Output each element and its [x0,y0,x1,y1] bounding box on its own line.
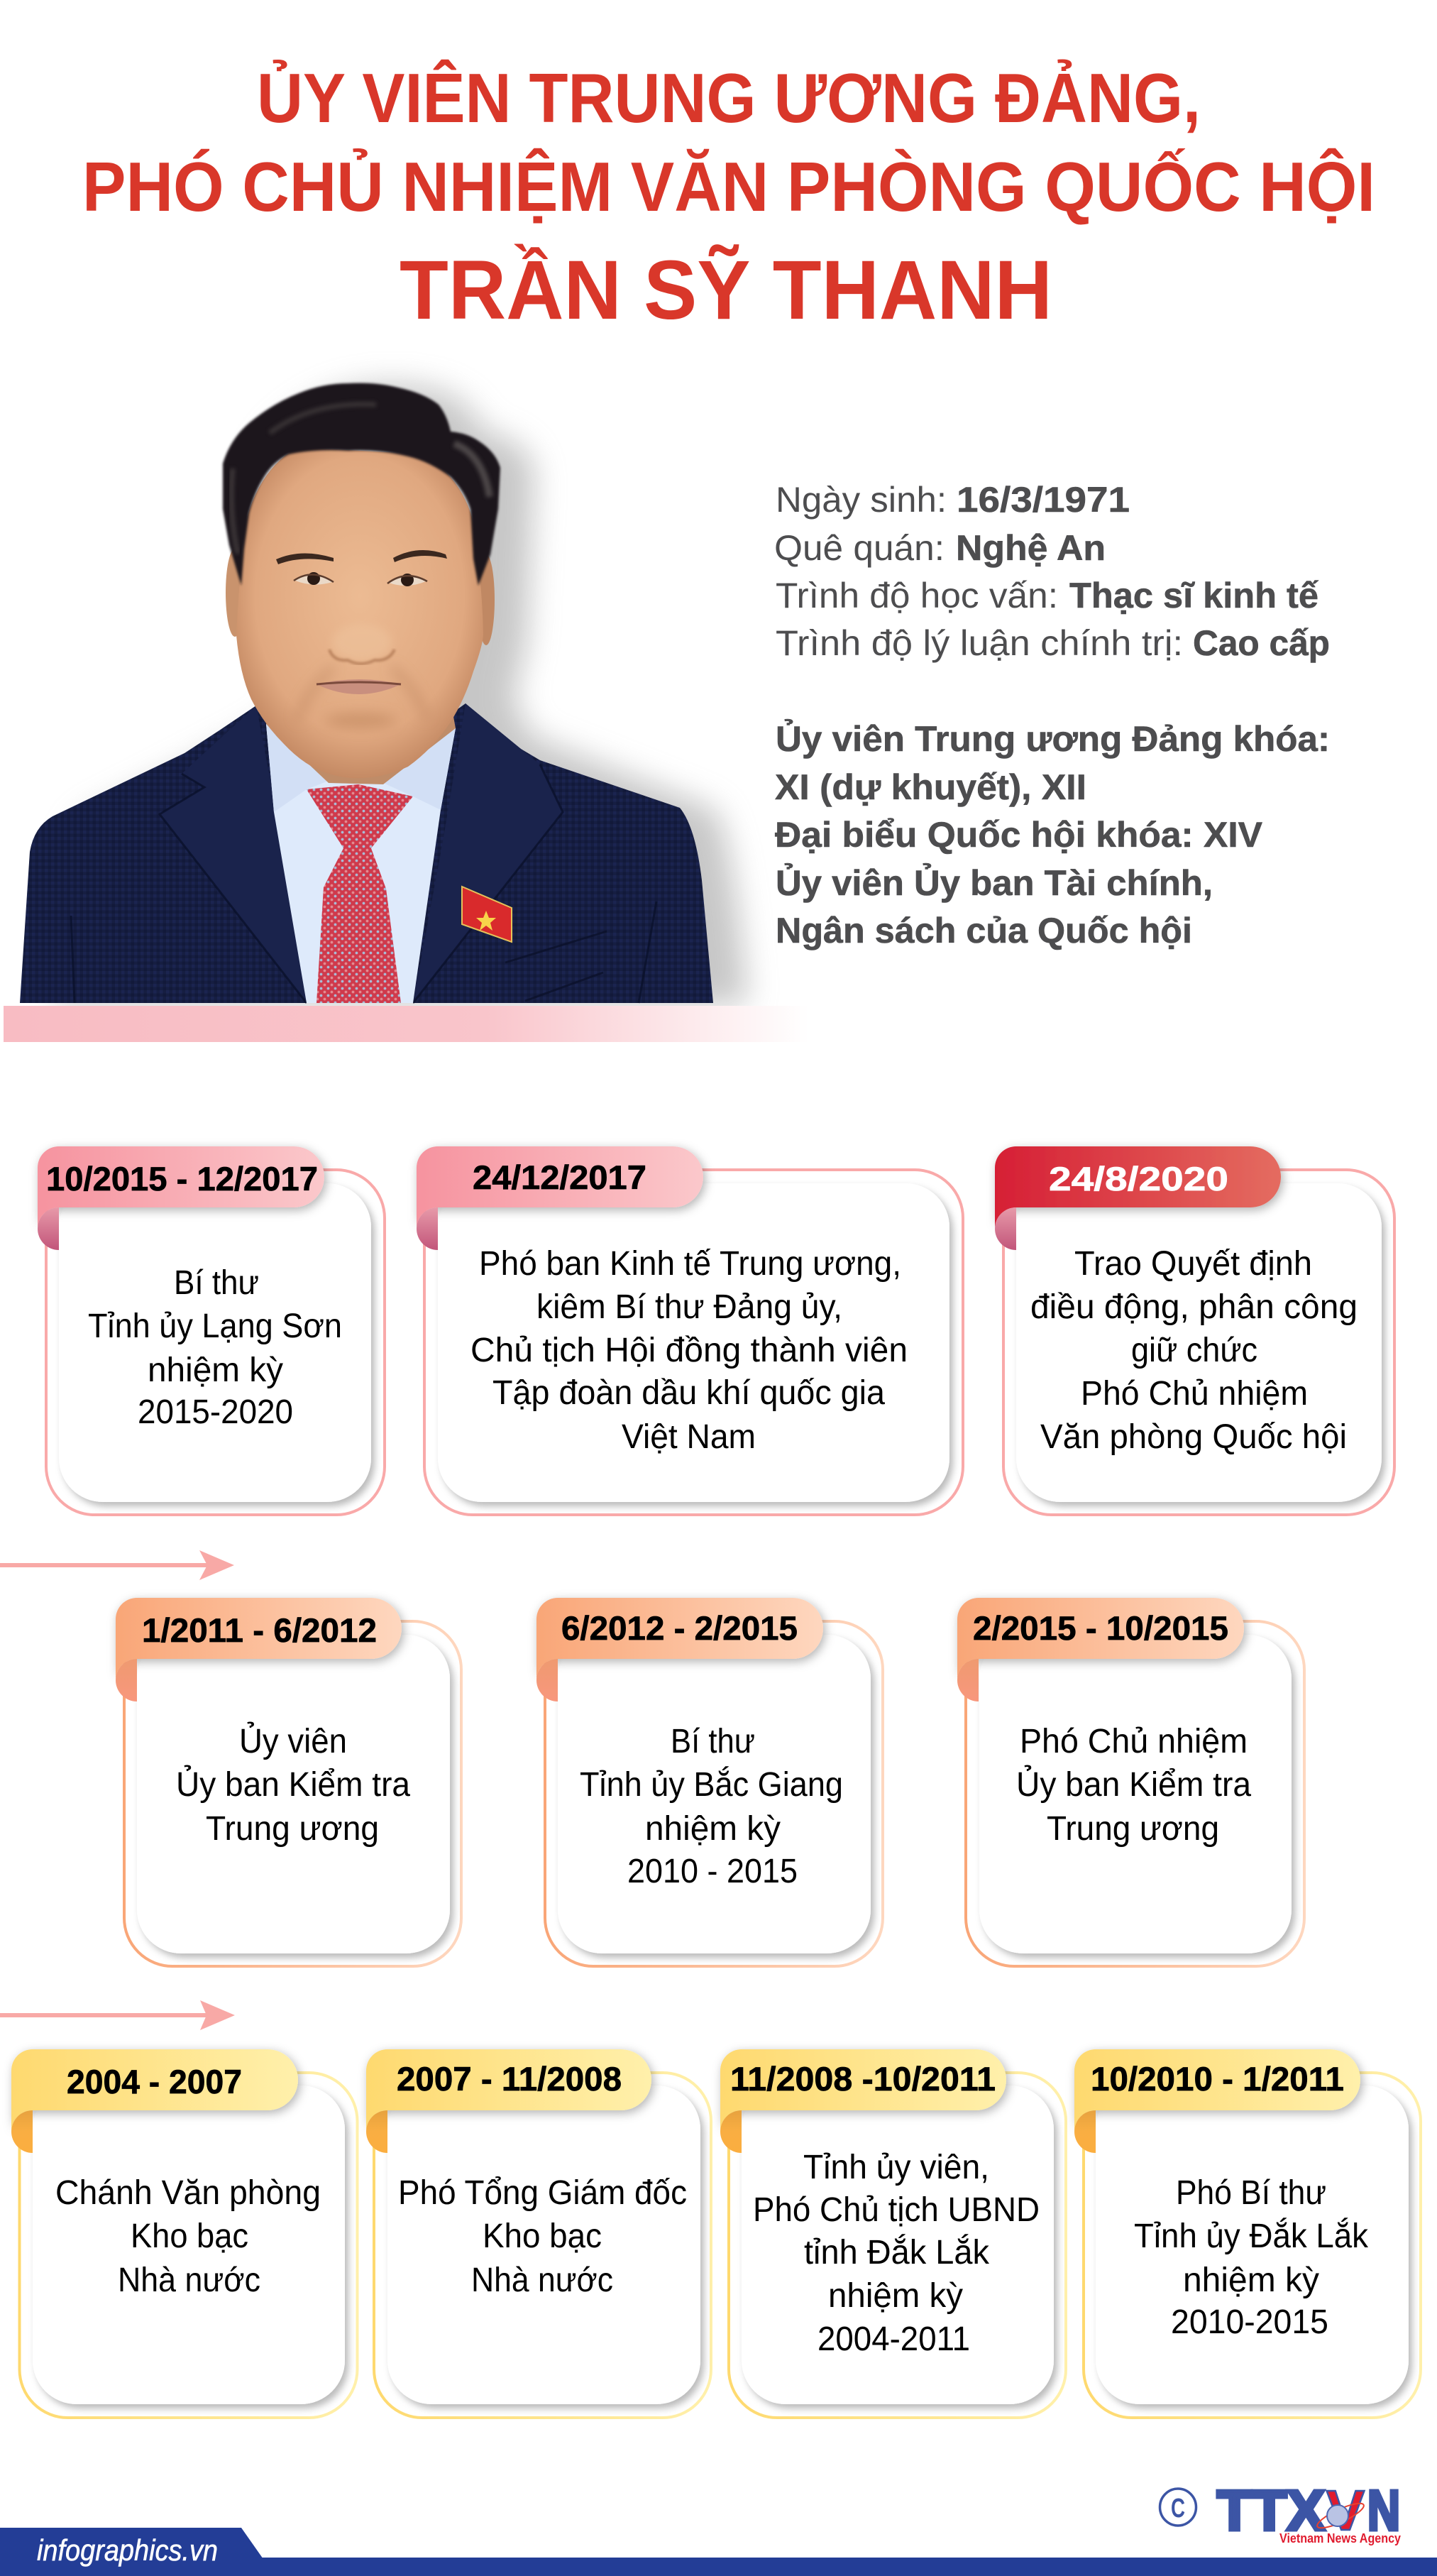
date ribbon: 1/2011 - 6/2012 [142,1611,377,1649]
date ribbon: 2/2015 - 10/2015 [973,1609,1228,1647]
biography facts: Thạc sĩ kinh tế [1069,576,1318,615]
biography positions: XI (dự khuyết), XII [775,767,1086,807]
arrow: row 2 to row 3 [0,2000,235,2030]
necktie [307,784,413,1003]
date ribbon [11,2049,298,2153]
title: PHÓ CHỦ NHIỆM VĂN PHÒNG QUỐC HỘI [82,148,1375,226]
date ribbon [417,1146,703,1250]
card text: 2004-2011 [817,2320,970,2358]
card text: Phó Chủ nhiệm [1020,1723,1248,1760]
card text: giữ chức [1131,1332,1257,1369]
card text: Kho bạc [131,2218,248,2255]
biography facts: Nghệ An [956,528,1106,568]
biography facts: Quê quán: [774,528,945,568]
hair [223,383,500,586]
footer site name: infographics.vn [37,2533,218,2567]
lapel pin flag [462,887,512,942]
card: 24/8/2020 [995,1146,1394,1515]
card text: Chánh Văn phòng [55,2174,321,2212]
title: TRẦN SỸ THANH [400,243,1052,337]
face shading [298,667,426,728]
card text: 2010 - 2015 [627,1853,798,1890]
title [82,59,1375,337]
date ribbon: 10/2010 - 1/2011 [1091,2060,1344,2098]
card text [1134,2174,1369,2341]
shirt [266,724,456,1003]
icon: globe [1315,2499,1366,2532]
card text: Tỉnh ủy Đắk Lắk [1134,2217,1369,2255]
card text: tỉnh Đắk Lắk [804,2233,990,2271]
date ribbon: 10/2015 - 12/2017 [46,1160,318,1197]
card text [580,1723,843,1890]
biography positions: Ủy viên Trung ương Đảng khóa: [776,718,1330,759]
card text [1016,1723,1251,1848]
date ribbon [1074,2049,1360,2153]
card text: Kho bạc [483,2218,602,2255]
date ribbon: 6/2012 - 2/2015 [561,1609,798,1647]
card text: Tỉnh ủy viên, [803,2149,989,2186]
card text: Phó ban Kinh tế Trung ương, [479,1245,901,1283]
card text: Tỉnh ủy Lạng Sơn [88,1308,342,1345]
card text: nhiệm kỳ [148,1352,283,1389]
collar [266,724,329,812]
date ribbon: 2004 - 2007 [67,2063,242,2100]
card text: Văn phòng Quốc hội [1040,1418,1347,1456]
card text: Tỉnh ủy Bắc Giang [580,1765,843,1804]
card text: Phó Bí thư [1176,2174,1326,2212]
nose [329,624,395,664]
card text: Chủ tịch Hội đồng thành viên [470,1332,908,1369]
card text: Ủy viên [239,1721,347,1760]
card text: 2010-2015 [1171,2303,1328,2341]
date ribbon: 24/12/2017 [473,1158,646,1196]
date ribbon [116,1598,402,1701]
date ribbon [366,2049,651,2153]
biography facts: 16/3/1971 [957,480,1130,520]
biography facts: Trình độ lý luận chính trị: [776,623,1183,663]
biography facts [774,480,1330,663]
title: ỦY VIÊN TRUNG ƯƠNG ĐẢNG, [257,59,1201,137]
card: 2004 - 2007 [11,2049,358,2418]
footer band [0,2528,1437,2576]
icon: copyright [1160,2489,1196,2526]
biography facts: Cao cấp [1193,623,1330,663]
biography positions [775,718,1330,950]
icon: copyright: C [1171,2494,1185,2523]
date ribbon: 24/8/2020 [1049,1160,1228,1197]
card text: kiêm Bí thư Đảng ủy, [536,1288,842,1326]
date ribbon [536,1598,823,1701]
arrow: row 1 to row 2 [0,1550,234,1580]
card: 2/2015 - 10/2015 [957,1598,1304,1966]
card text: Nhà nước [118,2262,260,2299]
card text: Phó Tổng Giám đốc [398,2174,687,2212]
mouth [316,679,401,694]
biography positions: Đại biểu Quốc hội khóa: XIV [775,815,1263,855]
card text: nhiệm kỳ [645,1810,781,1848]
logo: TTXVN: V [1326,2479,1365,2542]
logo: TTXVN: Vietnam News Agency [1279,2531,1401,2545]
card text: điều động, phân công [1030,1288,1358,1326]
card: 2007 - 11/2008 [366,2049,711,2418]
card text: Trung ương [1047,1810,1219,1848]
card: 11/2008 - 10/2011 [720,2049,1066,2418]
card text: Việt Nam [622,1418,756,1456]
date ribbon: 2007 - 11/2008 [397,2060,622,2098]
face [236,447,483,778]
biography facts: Trình độ học vấn: [776,576,1058,615]
biography facts: Ngày sinh: [776,480,947,520]
card text: Phó Chủ tịch UBND [753,2191,1040,2229]
card: 1/2011 - 6/2012 [116,1598,461,1966]
card: 10/2010 - 1/2011 [1074,2049,1421,2418]
suit jacket [20,703,713,1003]
logo: TTXVN: N [1367,2479,1400,2542]
card text: nhiệm kỳ [1183,2262,1319,2299]
card text: Ủy ban Kiểm tra [1016,1765,1251,1804]
biography positions: Ngân sách của Quốc hội [776,911,1192,950]
card text: Trao Quyết định [1074,1245,1312,1283]
card text: 2015-2020 [138,1393,293,1431]
ears [226,549,244,637]
card text [55,2174,321,2299]
logo: TTXVN: TTX [1217,2479,1325,2542]
card text: Tập đoàn dầu khí quốc gia [492,1374,885,1412]
card: 6/2012 - 2/2015 [536,1598,883,1966]
card: 24/12/2017 [417,1146,963,1515]
card text: Bí thư [174,1264,259,1302]
date ribbon [957,1598,1244,1701]
card text: Nhà nước [471,2262,613,2299]
lapels [160,706,307,1003]
card text: Bí thư [671,1723,755,1760]
portrait photo [20,383,747,1004]
card text [470,1245,908,1456]
eyes [294,572,427,586]
card text: Ủy ban Kiểm tra [176,1765,410,1804]
card text: nhiệm kỳ [828,2277,963,2315]
card text [398,2174,687,2299]
neck [266,681,456,784]
biography positions: Ủy viên Ủy ban Tài chính, [776,862,1213,903]
date ribbon [38,1146,324,1250]
card text [176,1721,410,1848]
card text [88,1264,342,1431]
date ribbon [720,2049,1006,2153]
date ribbon [995,1146,1281,1250]
card: 10/2015 - 12/2017 [38,1146,385,1515]
card text: Phó Chủ nhiệm [1081,1375,1308,1413]
logo: TTXVN [1160,2479,1401,2545]
eyebrows [276,553,334,564]
card text [1030,1245,1358,1456]
pink band under portrait [4,1006,809,1042]
card text [753,2149,1040,2358]
card text: Trung ương [206,1810,379,1848]
date ribbon: 11/2008 -10/2011 [730,2060,996,2098]
